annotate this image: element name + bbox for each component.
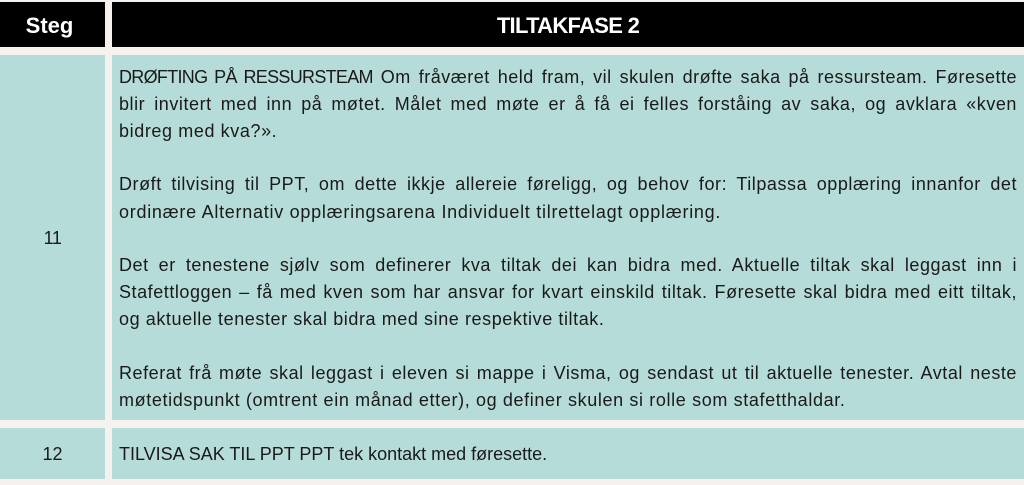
text block: paragraph 2: ordinære Alternativ opplæringsarena Individuelt tilrettelagt opplæring. (119, 202, 721, 222)
text block: paragraph 1: bidreg med kva?». (119, 121, 277, 141)
header: Tiltakfase 2: TILTAKFASE 2 (497, 13, 639, 38)
header: Steg: Steg (26, 13, 73, 38)
text block: step 12 text: TILVISA SAK TIL PPT PPT tek kontakt med føresette. (119, 444, 547, 464)
header: Steg (0, 2, 105, 47)
text block: paragraph 4: møtetidspunkt (omtrent ein månad etter), og definer skulen si rolle som stafetthaldar. (119, 390, 846, 410)
panel: step 12 description (112, 428, 1024, 479)
text block: paragraph 3: Det er tenestene sjølv som definerer kva tiltak dei kan bidra med. Aktuelle tiltak skal leggast inn i (119, 255, 1017, 275)
step number cell: 11: 11 (44, 228, 61, 248)
step number cell: 12: 12 (42, 444, 63, 464)
panel: step 11 description (112, 55, 1024, 420)
text block: paragraph 2: Drøft tilvising til PPT, om dette ikkje allereie føreligg, og behov for: Tilpassa opplæring innanfor det (119, 174, 1017, 194)
text block: paragraph 1: blir invitert med inn på møtet. Målet med møte er å få ei felles forståing av saka, og avklara «kven (119, 94, 1017, 114)
step number cell: 11 (0, 55, 105, 420)
step number cell: 12 (0, 428, 105, 479)
header: Tiltakfase 2 (112, 2, 1024, 47)
text block: paragraph 3 (119, 255, 1017, 329)
text block: paragraph 3: og aktuelle tenester skal bidra med sine respektive tiltak. (119, 309, 604, 329)
text block: paragraph 4: Referat frå møte skal leggast i eleven si mappe i Visma, og sendast ut til aktuelle tenester. Avtal neste (119, 363, 1017, 383)
text block: paragraph 3: Stafettloggen – få med kven som har ansvar for kvart einskild tiltak. Føresette skal bidra med eitt tiltak, (119, 282, 1017, 302)
text block: paragraph 4 (119, 363, 1017, 410)
text block: paragraph 1 (119, 67, 1017, 141)
text block: paragraph 2 (119, 174, 1017, 222)
text block: paragraph 1: DRØFTING PÅ RESSURSTEAM Om fråværet held fram, vil skulen drøfte saka på ressursteam. Føresette (119, 67, 1017, 87)
